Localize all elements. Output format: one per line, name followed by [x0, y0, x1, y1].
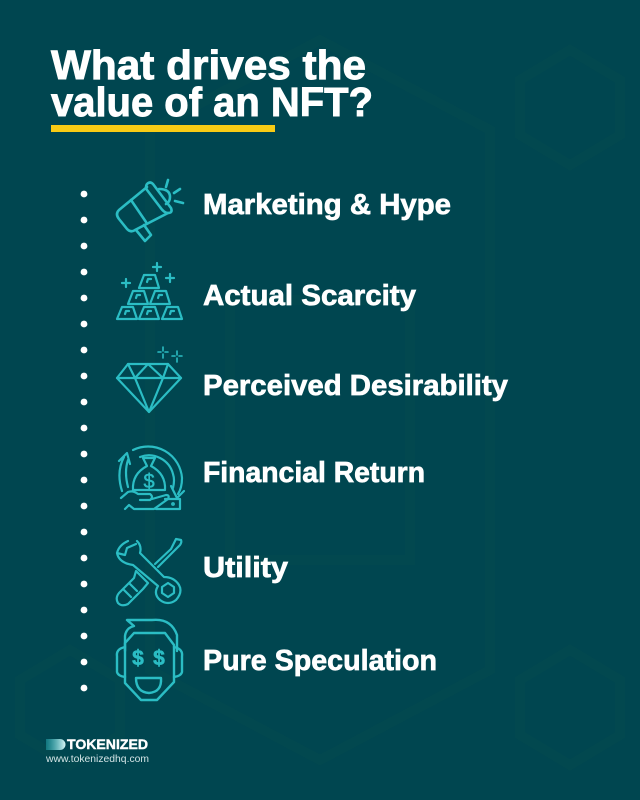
- icon: dollar eyes: [132, 647, 165, 670]
- website url: www.tokenizedhq.com: [45, 753, 149, 765]
- icon: diamond: [117, 347, 182, 412]
- labels: Utility: [203, 552, 288, 584]
- brand name: TOKENIZED: [67, 737, 148, 752]
- logo mark: [46, 739, 66, 750]
- title: What drives the: [51, 42, 366, 88]
- labels: Actual Scarcity: [203, 280, 416, 312]
- icon: dollar eyes: $: [132, 647, 144, 670]
- title: value of an NFT?: [51, 79, 373, 125]
- labels: Marketing & Hype: [203, 189, 451, 221]
- icon: megaphone: [117, 180, 183, 241]
- icon: gold bars: [117, 263, 182, 319]
- icon: financial return: $: [143, 471, 155, 493]
- labels: Financial Return: [203, 457, 425, 489]
- icon: financial return: [119, 446, 184, 509]
- labels: Pure Speculation: [203, 645, 437, 677]
- title: [51, 42, 373, 125]
- icon: wrench and screwdriver: [117, 539, 181, 605]
- labels: [203, 189, 508, 677]
- labels: Perceived Desirability: [203, 370, 508, 402]
- icon: dollar eyes: $: [153, 647, 165, 670]
- title underline: [51, 125, 275, 132]
- dotted timeline: [81, 191, 87, 691]
- icon: face with dollar eyes: [117, 620, 182, 700]
